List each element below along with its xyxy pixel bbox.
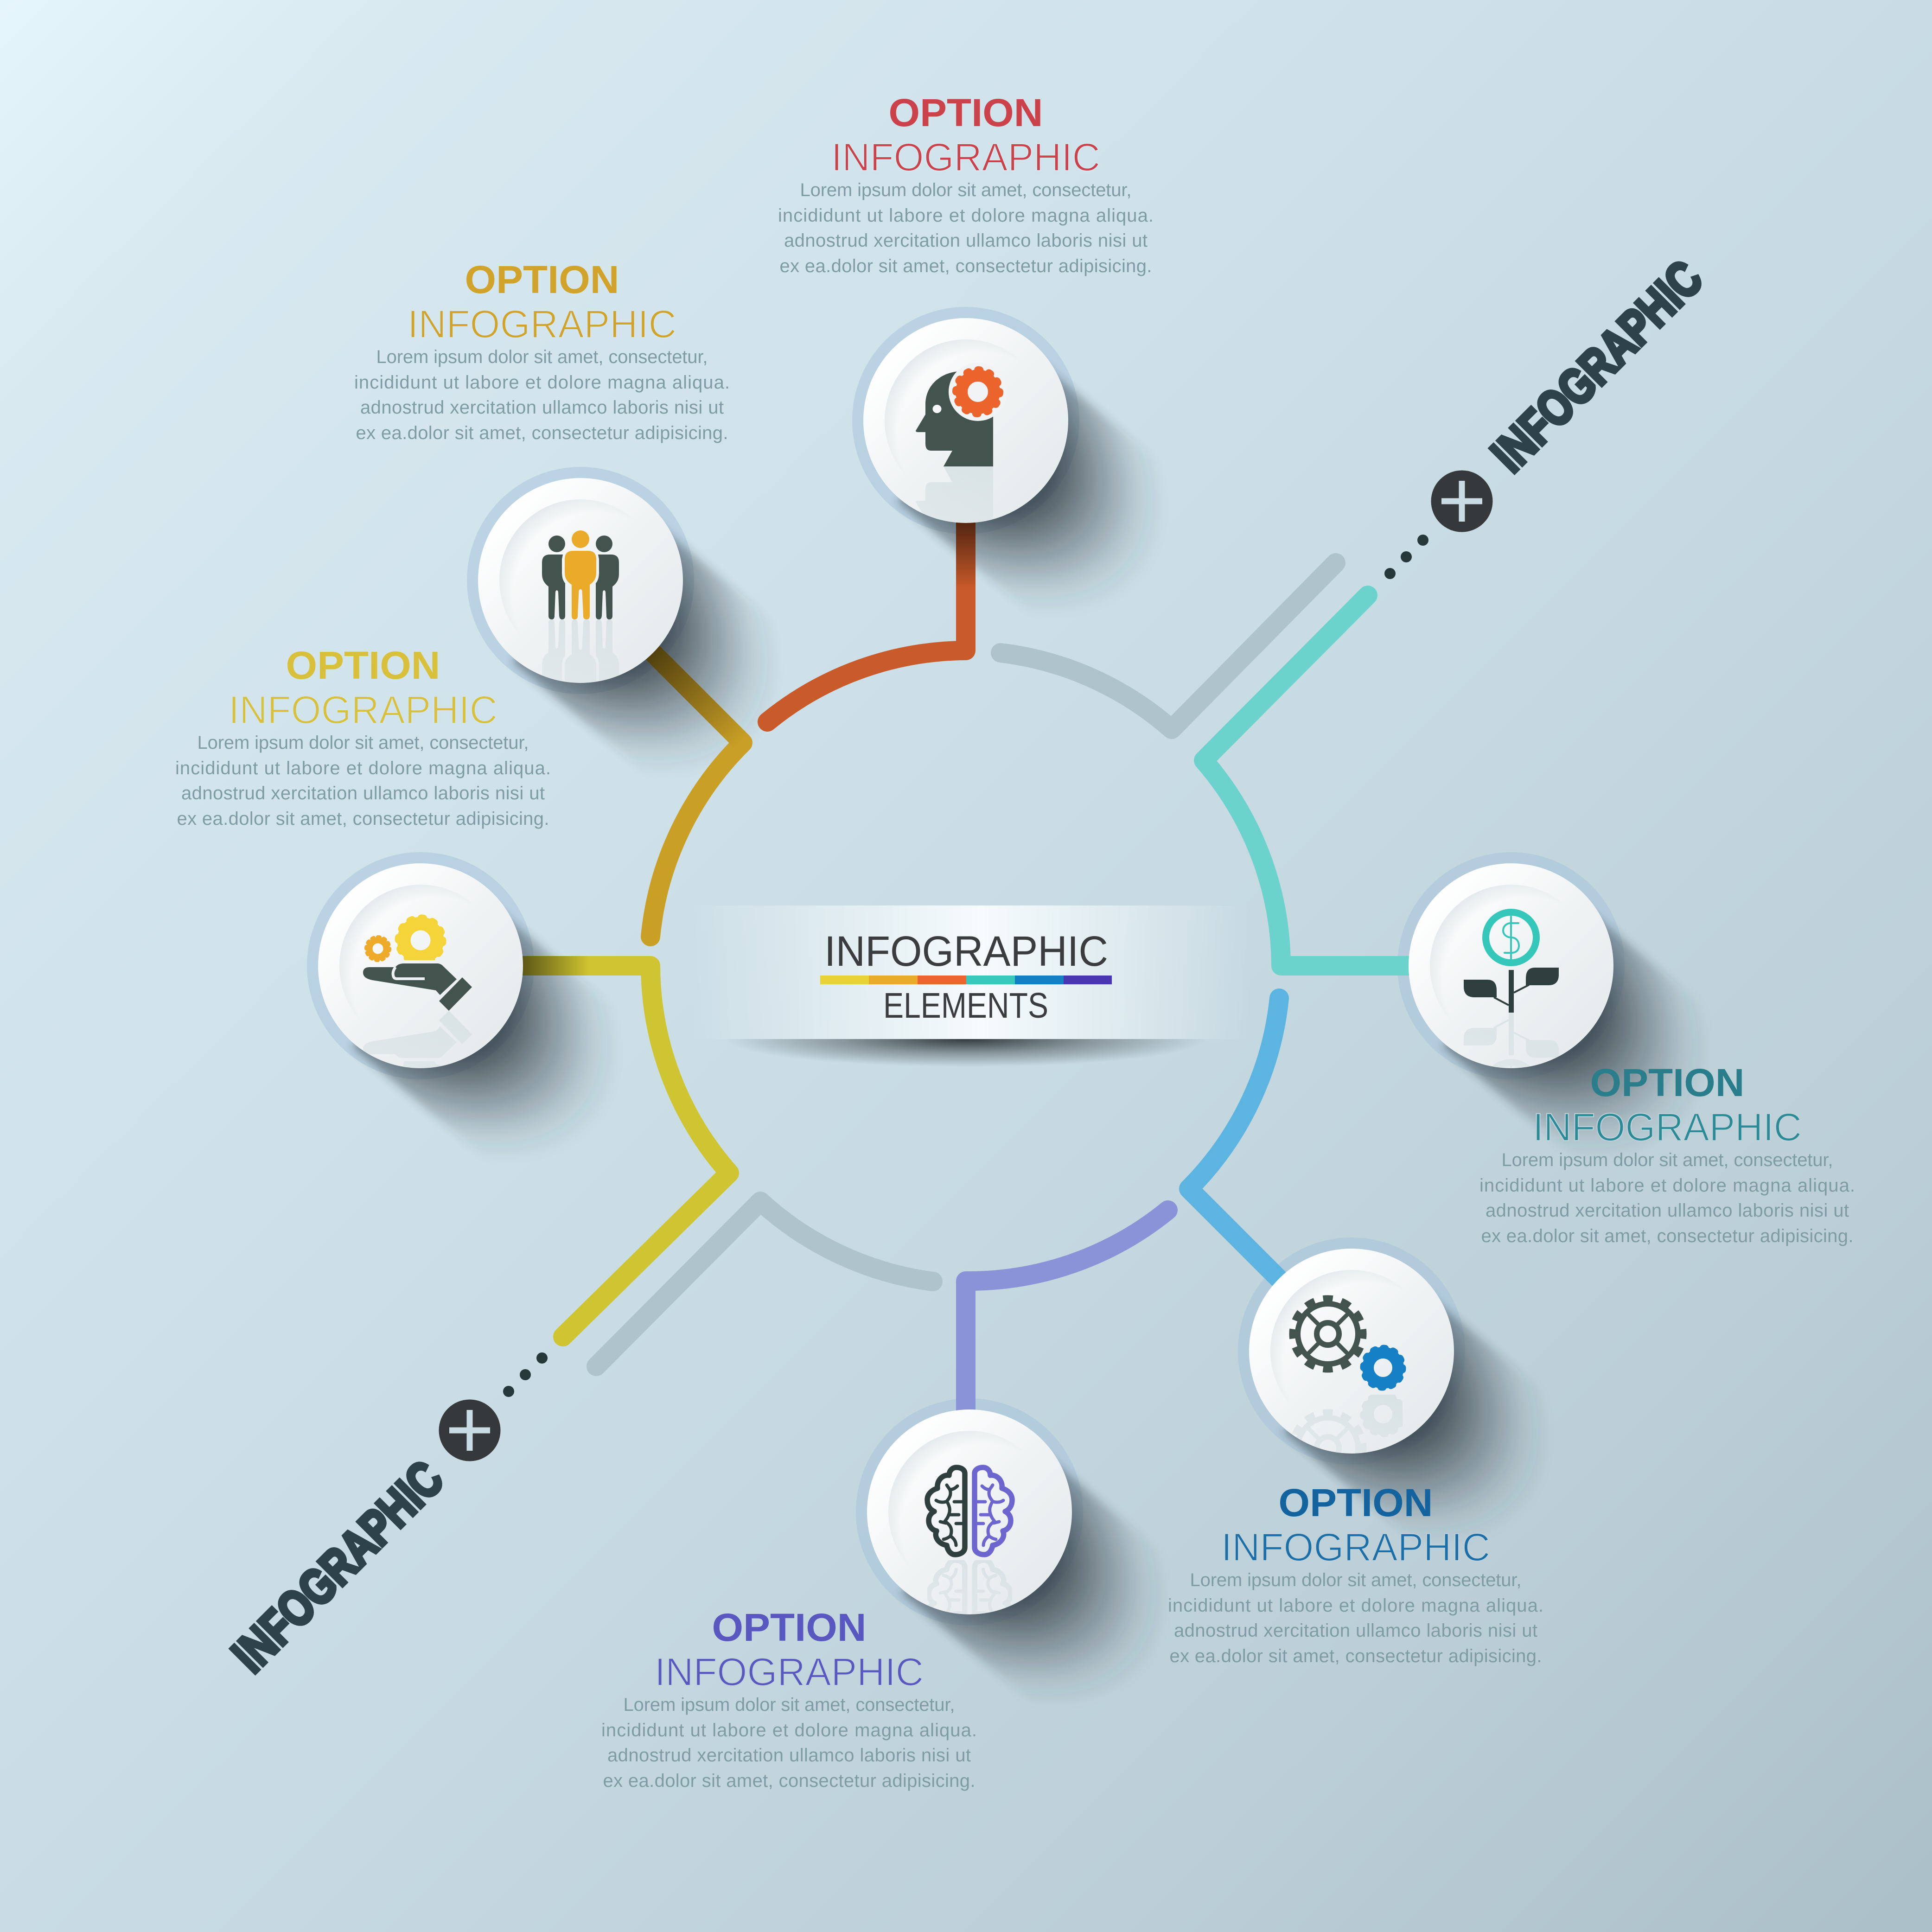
panel: option yellow: ex ea.dolor sit amet, consectetur adipisicing.	[177, 809, 549, 829]
icon: two gears	[1292, 1298, 1403, 1387]
icon: three people	[542, 530, 619, 619]
panel: option blue: adnostrud xercitation ullamco laboris nisi ut	[1174, 1620, 1537, 1641]
connector: blue	[1189, 998, 1294, 1294]
panel: option purple: INFOGRAPHIC	[655, 1650, 924, 1694]
icon: head with gear	[916, 363, 1007, 466]
icon: plus	[1431, 470, 1493, 532]
upper right tag	[1384, 250, 1713, 579]
icon: plus	[439, 1399, 501, 1461]
banner shadow	[738, 1039, 1192, 1065]
panel: option teal: adnostrud xercitation ullamco laboris nisi ut	[1486, 1200, 1849, 1221]
icon: plant with dollar coin	[1464, 912, 1559, 1013]
lower left tag	[221, 1352, 548, 1683]
panel: option gold: INFOGRAPHIC	[408, 302, 676, 346]
disc: team	[478, 478, 683, 683]
disc: hand with gears	[318, 863, 523, 1068]
panel: option teal	[1479, 1061, 1855, 1246]
dots	[1384, 535, 1428, 579]
panel: option blue: ex ea.dolor sit amet, consectetur adipisicing.	[1169, 1646, 1542, 1666]
panel: option blue: Lorem ipsum dolor sit amet, consectetur,	[1190, 1570, 1522, 1590]
icon: brain	[927, 1467, 1012, 1555]
panel: option blue: OPTION	[1279, 1481, 1433, 1524]
colour bar	[820, 976, 1112, 984]
panel: option gold: incididunt ut labore et dolore magna aliqua.	[354, 372, 730, 393]
panel: option purple: adnostrud xercitation ullamco laboris nisi ut	[607, 1745, 971, 1766]
panel: option gold: Lorem ipsum dolor sit amet, consectetur,	[376, 347, 708, 367]
panel: option yellow: INFOGRAPHIC	[229, 688, 497, 732]
panel: option purple: ex ea.dolor sit amet, consectetur adipisicing.	[603, 1771, 976, 1791]
diagonal label: INFOGRAPHIC	[221, 1450, 453, 1683]
connector: grey upper right	[1001, 563, 1336, 729]
panel: option red: OPTION	[888, 91, 1043, 134]
panel: option blue: INFOGRAPHIC	[1221, 1525, 1490, 1569]
panel: option teal: incididunt ut labore et dolore magna aliqua.	[1479, 1175, 1855, 1196]
panel: option blue: incididunt ut labore et dolore magna aliqua.	[1168, 1595, 1543, 1616]
long shadows of the option discs	[352, 350, 1759, 1751]
icon: hand holding gears	[363, 918, 472, 1011]
panel: option red: ex ea.dolor sit amet, consectetur adipisicing.	[780, 256, 1152, 276]
panel: option teal: OPTION	[1590, 1061, 1744, 1104]
panel: option gold	[354, 258, 730, 443]
panel: option gold: adnostrud xercitation ullamco laboris nisi ut	[360, 397, 724, 418]
panel: option gold: OPTION	[465, 258, 619, 301]
connector: orange	[767, 515, 966, 722]
panel: option purple	[601, 1606, 977, 1791]
disc: brain	[867, 1409, 1072, 1647]
diagonal label: INFOGRAPHIC	[1480, 250, 1713, 482]
panel: option blue	[1168, 1481, 1543, 1666]
panel: option red: adnostrud xercitation ullamco laboris nisi ut	[784, 230, 1148, 251]
panel: option yellow: adnostrud xercitation ullamco laboris nisi ut	[181, 783, 545, 803]
panel: option gold: ex ea.dolor sit amet, consectetur adipisicing.	[356, 423, 728, 443]
panel: option purple: OPTION	[712, 1606, 866, 1649]
disc: gears	[1249, 1249, 1454, 1484]
ring of coloured connector lines	[510, 510, 1419, 1414]
panel: option yellow	[175, 644, 551, 829]
panel: option teal: Lorem ipsum dolor sit amet, consectetur,	[1501, 1150, 1833, 1170]
disc: head with gear	[863, 318, 1068, 523]
connector: grey lower left	[596, 1201, 933, 1366]
connector: gold	[580, 580, 743, 937]
connector: yellow	[510, 966, 729, 1337]
connector: purple	[966, 1210, 1168, 1414]
panel: option teal: INFOGRAPHIC	[1533, 1105, 1802, 1149]
translucent outer rings of the discs	[307, 307, 1625, 1626]
panel: option red: incididunt ut labore et dolore magna aliqua.	[778, 205, 1154, 226]
panel: option yellow: Lorem ipsum dolor sit amet, consectetur,	[198, 733, 529, 753]
banner title: INFOGRAPHIC	[824, 928, 1108, 975]
panel: option red	[778, 91, 1154, 276]
panel: option purple: Lorem ipsum dolor sit amet, consectetur,	[623, 1695, 955, 1715]
banner subtitle: ELEMENTS	[883, 986, 1048, 1026]
panel: option purple: incididunt ut labore et dolore magna aliqua.	[601, 1720, 977, 1741]
panel: option red: INFOGRAPHIC	[831, 135, 1100, 179]
panel: option yellow: OPTION	[286, 644, 440, 687]
connector: teal	[1204, 595, 1419, 966]
panel: option yellow: incididunt ut labore et dolore magna aliqua.	[175, 758, 551, 778]
disc: money plant	[1409, 863, 1613, 1113]
dots	[503, 1352, 548, 1397]
panel: option teal: ex ea.dolor sit amet, consectetur adipisicing.	[1481, 1226, 1854, 1246]
central banner	[738, 905, 1205, 1065]
panel: option red: Lorem ipsum dolor sit amet, consectetur,	[800, 180, 1131, 200]
